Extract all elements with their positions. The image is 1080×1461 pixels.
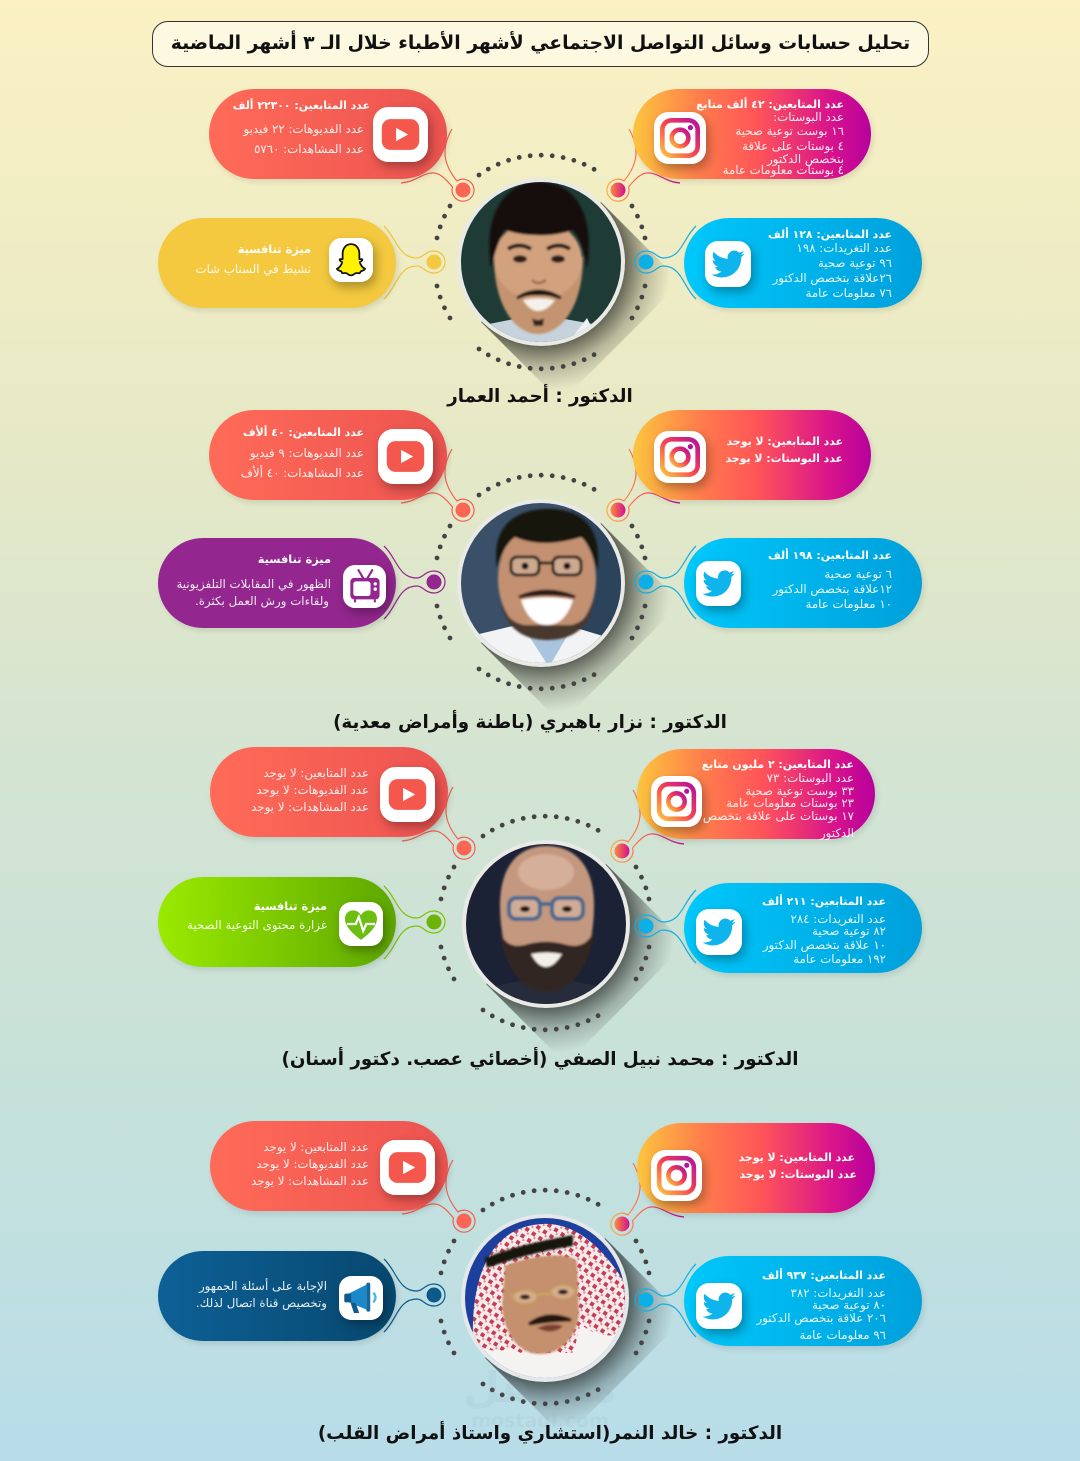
icon: snapchat [326, 237, 382, 293]
panel: youtube: عدد المتابعين: لا يوجد [263, 766, 369, 780]
watermark: mostaql.com [471, 1410, 609, 1432]
panel: twitter [684, 218, 922, 308]
panel: instagram: ٤ بوستات معلومات عامة [723, 163, 844, 177]
hub graphic 1 [384, 128, 696, 388]
doctor section 4 [158, 1121, 924, 1444]
panel: instagram [633, 410, 871, 500]
panel: youtube: عدد المشاهدات: ٤٠ ألأف [241, 466, 364, 480]
panel: tv advantage: ولقاءات ورش العمل بكثرة. [195, 594, 329, 608]
panel: instagram: الدكتور [820, 826, 854, 840]
connector: instagram [611, 1163, 684, 1235]
panel: audience advantage: الإجابة على أسئلة الجمهور [199, 1279, 327, 1293]
panel: instagram [637, 1123, 875, 1213]
panel: twitter: ٢٠٦ علاقة بتخصص الدكتور [757, 1311, 886, 1325]
dotted ring [437, 475, 645, 689]
panel: twitter: عدد التغريدات: ٢٨٤ [791, 912, 886, 926]
dotted ring [437, 155, 645, 369]
icon: instagram [648, 1149, 711, 1212]
panel: instagram: عدد البوستات: لا يوجد [740, 1168, 857, 1181]
icon: youtube [375, 428, 442, 495]
doctor name: الدكتور : خالد النمر(استشاري واستاذ أمراض القلب) [318, 1423, 782, 1444]
panel: health advantage: ميزة تنافسية [254, 899, 327, 913]
panel: twitter: عدد المتابعين: ٩٣٧ ألف [762, 1269, 886, 1282]
icon: twitter [693, 908, 751, 966]
panel: twitter [684, 538, 922, 628]
connector: instagram [607, 129, 680, 201]
icon: instagram [648, 775, 711, 838]
panel: youtube: عدد المتابعين: ٢٢٣٠٠ ألف [233, 99, 370, 112]
connector: advantage [384, 546, 445, 619]
connector: twitter [635, 1264, 696, 1337]
icon: instagram [651, 111, 715, 175]
panel: twitter: ٢٦علاقة بتخصص الدكتور [773, 271, 892, 285]
panel: youtube [210, 1121, 448, 1211]
panel: health advantage [158, 877, 396, 967]
icon: instagram [651, 430, 715, 494]
panel: snapchat advantage: نشيط في السناب شات [195, 262, 311, 276]
panel: twitter: ١٠ علاقة بتخصص الدكتور [763, 938, 886, 952]
dotted ring [441, 816, 649, 1030]
photo shadow [486, 864, 686, 1064]
panel: twitter: ٨٢ توعية صحية [812, 924, 886, 938]
connector: twitter [635, 546, 696, 619]
panel: instagram: عدد المتابعين: لا يوجد [727, 435, 843, 448]
connector: youtube [402, 1160, 475, 1232]
panel: snapchat advantage [158, 218, 396, 308]
panel: snapchat advantage: ميزة تنافسية [238, 242, 311, 256]
panel: youtube [209, 410, 447, 500]
connector: youtube [401, 449, 474, 521]
panel: health advantage: غزارة محتوى التوعية الصحية [187, 918, 327, 932]
panel: youtube: عدد الفديوهات: ٩ فيديو [250, 446, 364, 460]
panel: instagram: عدد البوستات: ٧٣ [767, 771, 854, 785]
panel: twitter: ١٠ معلومات عامة [806, 597, 892, 611]
photo: Nizar Bahabri [456, 498, 626, 668]
panel: youtube [210, 747, 448, 837]
photo shadow [481, 202, 681, 402]
panel: instagram: ٣٣ بوست توعية صحية [745, 784, 854, 798]
panel: youtube: عدد المتابعين: لا يوجد [263, 1140, 369, 1154]
panel: twitter: ٧٦ معلومات عامة [806, 286, 892, 300]
panel: youtube: عدد المتابعين: ٤٠ ألأف [243, 426, 364, 439]
hub graphic 2 [384, 448, 696, 708]
connector: youtube [402, 787, 475, 859]
photo: Ahmad Al-Ammar [456, 177, 626, 347]
panel: instagram: عدد المتابعين: ٢ مليون متابع [702, 758, 854, 771]
panel: youtube: عدد المشاهدات: لا يوجد [251, 800, 369, 814]
connector: youtube [401, 129, 474, 201]
panel: instagram [633, 89, 871, 179]
panel: instagram: عدد المتابعين: لا يوجد [739, 1151, 855, 1164]
photo: Khalid Al-Nimr [460, 1213, 635, 1383]
doctor name: الدكتور : محمد نبيل الصفي (أخصائي عصب. دكتور أسنان) [281, 1049, 799, 1070]
icon: youtube [370, 106, 437, 173]
panel: twitter: ٨٠ توعية صحية [812, 1298, 886, 1312]
icon: megaphone [338, 1276, 390, 1328]
doctor section 2 [158, 410, 925, 733]
panel: youtube: عدد الفديوهات: لا يوجد [256, 783, 369, 797]
panel: instagram: ٤ بوستات على علاقة [742, 139, 844, 153]
panel: instagram [637, 749, 875, 839]
panel: youtube: عدد الفديوهات: ٢٢ فيديو [243, 122, 364, 136]
panel: twitter: ٦ توعية صحية [824, 567, 892, 581]
icon: twitter [693, 560, 750, 617]
doctor section 1 [158, 89, 925, 407]
icon: youtube [377, 766, 444, 833]
icon: youtube [377, 1139, 444, 1206]
panel: twitter: عدد المتابعين: ٢١١ ألف [762, 895, 886, 908]
panel: instagram: بتخصص الدكتور [767, 152, 844, 166]
panel: twitter: عدد المتابعين: ١٩٨ ألف [768, 549, 892, 562]
photo shadow [481, 523, 681, 723]
doctor name: الدكتور : نزار باهبري (باطنة وأمراض معدية) [333, 712, 727, 733]
title: تحليل حسابات وسائل التواصل الاجتماعي لأشهر الأطباء خلال الـ ٣ أشهر الماضية [171, 33, 910, 54]
hub graphic 3 [384, 786, 696, 1050]
panel: twitter [684, 1256, 922, 1346]
panel: instagram: ٢٣ بوستات معلومات عامة [726, 796, 854, 810]
icon: twitter [702, 240, 760, 298]
panel: twitter: عدد التغريدات: ٣٨٢ [791, 1286, 886, 1300]
icon: heart [337, 902, 391, 956]
icon: twitter [693, 1282, 751, 1340]
panel: audience advantage [158, 1251, 396, 1341]
connector: instagram [607, 449, 680, 521]
panel: audience advantage: وتخصيص قناة اتصال لذلك. [196, 1296, 327, 1310]
panel: youtube: عدد المشاهدات: لا يوجد [251, 1174, 369, 1188]
panel: twitter: عدد التغريدات: ١٩٨ [797, 241, 892, 255]
connector: advantage [384, 886, 445, 959]
connector: advantage [384, 1259, 445, 1332]
panel: twitter [684, 883, 922, 973]
dotted ring [441, 1190, 649, 1404]
panel: instagram: عدد البوستات: لا يوجد [726, 452, 843, 465]
hub graphic 4 [384, 1160, 696, 1432]
connector: instagram [611, 790, 684, 862]
panel: instagram: ١٧ بوستات على علاقة بتخصص [703, 809, 854, 823]
panel: youtube [209, 89, 447, 179]
connector: snapchat [384, 226, 445, 299]
photo shadow [485, 1238, 685, 1438]
panel: instagram: عدد البوستات: [773, 110, 844, 124]
panel: tv advantage: الظهور في المقابلات التلفزيونية [176, 577, 331, 591]
title [152, 21, 929, 67]
panel: twitter: ١٢علاقة بتخصص الدكتور [773, 582, 892, 596]
doctor section 3 [158, 747, 924, 1070]
doctor name: الدكتور : أحمد العمار [447, 386, 633, 407]
panel: instagram: عدد المتابعين: ٤٢ ألف متابع [696, 98, 844, 111]
panel: twitter: ٩٦ معلومات عامة [800, 1328, 886, 1342]
watermark: مستقل [463, 1363, 617, 1412]
connector: twitter [635, 890, 696, 963]
connector: twitter [635, 226, 696, 299]
panel: tv advantage [158, 538, 396, 628]
photo: Mohammed Nabil Al-Safi [461, 839, 631, 1009]
icon: tv [342, 565, 394, 618]
panel: youtube: عدد الفديوهات: لا يوجد [256, 1157, 369, 1171]
panel: twitter: ١٩٢ معلومات عامة [793, 952, 886, 966]
panel: instagram: ١٦ بوست توعية صحية [735, 124, 844, 138]
panel: tv advantage: ميزة تنافسية [258, 552, 331, 566]
panel: twitter: ٩٦ توعية صحية [818, 256, 892, 270]
panel: twitter: عدد المتابعين: ١٢٨ ألف [768, 228, 892, 241]
panel: youtube: عدد المشاهدات: ٥٧٦٠ [254, 142, 364, 156]
